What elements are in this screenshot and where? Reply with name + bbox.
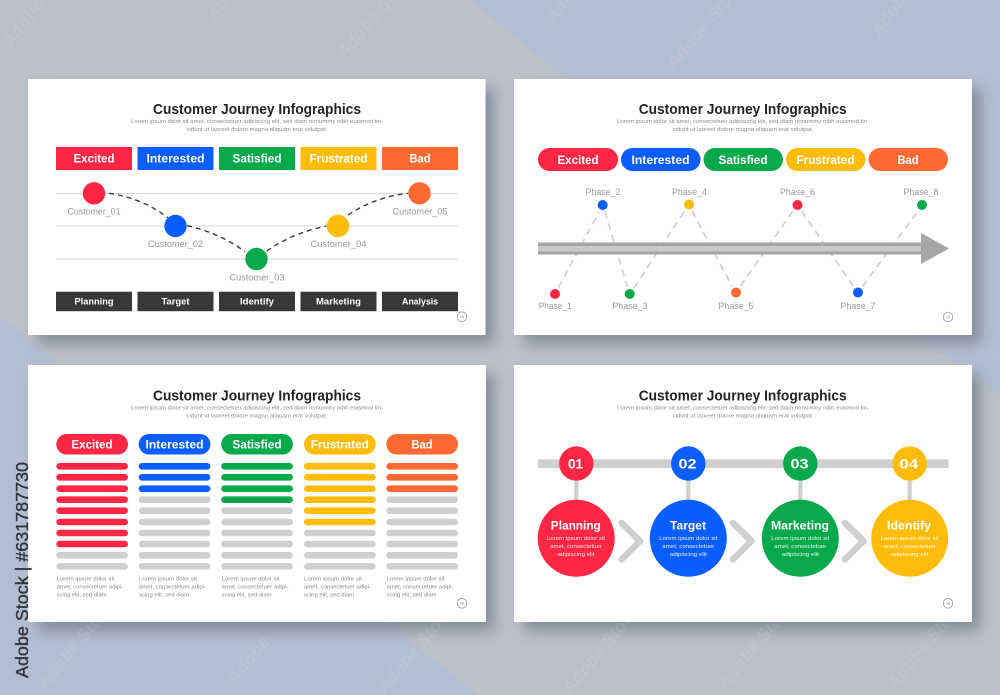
chevron 1 — [622, 523, 640, 560]
background watermarks: Adobe — [222, 632, 274, 688]
panel 2 page number: 14 — [946, 315, 950, 319]
phase dots and labels: Phase_8 — [904, 187, 938, 198]
panel 1 journey chart: Customer_05 — [392, 206, 448, 218]
column: Bad — [386, 434, 458, 598]
panel 2 page number — [943, 312, 953, 322]
step 04: Identify: amet, consectetuer — [884, 544, 936, 550]
panel 2 emotion pills: Satisfied — [718, 155, 768, 167]
panel 1 stage bars — [56, 292, 458, 311]
panel 3 page number — [457, 598, 467, 608]
panel 1 subtitle: cidunt ut laoreet dolore magna aliquam erat volutpat. — [186, 127, 328, 133]
arrow — [538, 233, 949, 264]
step 04: Identify: Lorem ipsum dolor sit — [881, 536, 939, 542]
step 01: Planning: Planning — [551, 520, 601, 532]
step 03: Marketing: adipiscing elit — [782, 552, 819, 558]
column: Bad: Lorem ipsum dolor sit — [386, 576, 445, 582]
column: Satisfied: Lorem ipsum dolor sit — [222, 576, 280, 582]
panel 2 emotion pills: Interested — [632, 155, 690, 167]
column: Interested: scing elit, sed diam — [139, 592, 189, 598]
chevron 2 — [733, 523, 752, 560]
panel 3 subtitle: Lorem ipsum dolor sit amet, consectetuer adipiscing elit, sed diam nonummy nibh euismod tin- — [131, 406, 383, 412]
phase dots and labels: Phase_6 — [780, 187, 815, 198]
background watermarks: Adobe Stock — [372, 600, 459, 695]
panel 1 page number — [457, 312, 467, 322]
panel 1 journey chart: Customer_02 — [148, 239, 203, 250]
panel 1 journey chart: Customer_04 — [310, 239, 366, 250]
phase dots and labels: Phase_5 — [718, 301, 754, 312]
phase dots and labels — [539, 187, 938, 312]
column: Excited: scing elit, sed diam — [56, 592, 107, 598]
panel 3 page number: 15 — [460, 602, 464, 606]
panel 2 subtitle: Lorem ipsum dolor sit amet, consectetuer adipiscing elit, sed diam nonummy nibh euismod tin- — [617, 119, 869, 125]
panel 1: customer journey with rectangles — [28, 79, 486, 335]
step 02: Target: 02 — [678, 456, 697, 472]
step 04: Identify: 04 — [899, 456, 919, 472]
panel 2: phase timeline — [514, 79, 972, 335]
column: Frustrated: amet, consectetuer adipi- — [304, 584, 371, 590]
panel 4 subtitle: Lorem ipsum dolor sit amet, consectetuer adipiscing elit, sed diam nonummy nibh euismod tin- — [617, 406, 869, 412]
step 03: Marketing — [762, 446, 839, 577]
panel 2 dashed connectors — [558, 211, 918, 288]
column: Bad: scing elit, sed diam — [386, 592, 437, 598]
panel 4 page number: 16 — [946, 602, 950, 606]
panel 1 journey chart: Customer_01 — [68, 206, 120, 218]
step 04: Identify: adipiscing elit — [891, 552, 929, 558]
step 02: Target: Target — [670, 520, 706, 532]
panel 1 emotion headers: Interested — [146, 154, 204, 166]
step 01: Planning: 01 — [568, 456, 583, 472]
step 03: Marketing: amet, consectetuer — [774, 544, 826, 550]
step 01: Planning — [538, 446, 615, 577]
panel 3 card — [28, 365, 486, 622]
column: Interested: Interested — [146, 439, 204, 451]
panel 1 stage bars: Identify — [240, 297, 274, 307]
panel 3 subtitle — [131, 406, 383, 420]
column: Bad: amet, consectetuer adipi- — [386, 584, 454, 590]
step 01: Planning: adipiscing elit — [558, 552, 595, 558]
phase dots and labels: Phase_1 — [539, 301, 572, 312]
panel 2 emotion pills: Bad — [898, 155, 918, 167]
column: Excited: amet, consectetuer adipi- — [56, 584, 124, 590]
panel 4 card — [514, 365, 972, 622]
panel 1 card — [28, 79, 486, 335]
column: Frustrated: Frustrated — [311, 439, 369, 451]
panel 1 title: Customer Journey Infographics — [153, 101, 361, 118]
background watermarks: Adobe Stock — [882, 595, 969, 693]
step 01: Planning: Lorem ipsum dolor sit — [547, 536, 605, 542]
panel 3 title: Customer Journey Infographics — [153, 387, 361, 404]
panel 2 subtitle — [617, 119, 869, 133]
panel 1 emotion headers — [56, 147, 458, 170]
panel 1 stage bars: Planning — [74, 297, 114, 307]
step 04: Identify — [871, 446, 948, 577]
panel 2 emotion pills: Frustrated — [796, 155, 854, 167]
column: Frustrated: Lorem ipsum dolor sit — [304, 576, 362, 582]
background watermarks: Adobe Stock — [712, 595, 799, 693]
step 02: Target: amet, consectetuer — [662, 544, 714, 550]
panel 2 emotion pills: Excited — [558, 155, 598, 167]
panel 1 emotion headers: Bad — [410, 154, 430, 166]
column: Excited — [56, 434, 128, 598]
panel 2 emotion pills — [538, 148, 948, 171]
column: Excited: Lorem ipsum dolor sit — [56, 576, 115, 582]
panel 1 journey chart — [56, 182, 458, 284]
phase dots and labels: Phase_3 — [612, 301, 648, 312]
step 02: Target: Lorem ipsum dolor sit — [659, 536, 718, 542]
panel 1 emotion headers: Satisfied — [232, 154, 282, 166]
panel 3: level bars — [28, 365, 486, 622]
step 02: Target — [650, 446, 727, 577]
step 03: Marketing: Marketing — [771, 520, 829, 532]
panel 4 page number — [943, 598, 953, 608]
step 03: Marketing: 03 — [790, 456, 809, 472]
column: Interested: amet, consectetuer adipi- — [139, 584, 206, 590]
column: Interested — [139, 434, 210, 598]
panel 2 subtitle: cidunt ut laoreet dolore magna aliquam erat volutpat. — [672, 127, 814, 133]
panel 2 title: Customer Journey Infographics — [639, 101, 847, 118]
panel 1 subtitle: Lorem ipsum dolor sit amet, consectetuer adipiscing elit, sed diam nonummy nibh euismod tin- — [131, 119, 383, 125]
panel 1 emotion headers: Excited — [74, 154, 114, 166]
column: Satisfied: Satisfied — [232, 439, 282, 451]
phase dots and labels: Phase_4 — [672, 187, 707, 198]
step 02: Target: adipiscing elit — [670, 552, 707, 558]
stock id vertical text: Adobe Stock | #631787730 — [12, 462, 32, 678]
chevron 3 — [845, 523, 864, 560]
phase dots and labels: Phase_7 — [840, 301, 876, 312]
timeline bar — [538, 459, 948, 468]
panel 4 title: Customer Journey Infographics — [639, 387, 847, 404]
step 04: Identify: Identify — [887, 520, 932, 532]
column: Interested: Lorem ipsum dolor sit — [139, 576, 197, 582]
panel 1 page number: 13 — [460, 315, 464, 319]
panel 2 card — [514, 79, 972, 335]
panel 1 stage bars: Analysis — [402, 297, 438, 307]
column: Satisfied: amet, consectetuer adipi- — [222, 584, 289, 590]
panel 4 subtitle — [617, 406, 869, 420]
panel shadows — [38, 88, 980, 631]
panel 4: numbered steps — [514, 365, 972, 622]
step 01: Planning: amet, consectetuer — [550, 544, 602, 550]
panel 1 journey chart: Customer_03 — [230, 272, 284, 284]
step 03: Marketing: Lorem ipsum dolor sit — [771, 536, 830, 542]
panel 3 subtitle: cidunt ut laoreet dolore magna aliquam erat volutpat. — [186, 414, 328, 420]
panel 1 stage bars: Target — [162, 297, 190, 307]
panel 4 subtitle: cidunt ut laoreet dolore magna aliquam erat volutpat. — [672, 414, 814, 420]
phase dots and labels: Phase_2 — [586, 187, 620, 198]
column: Satisfied — [221, 434, 293, 598]
panel 1 emotion headers: Frustrated — [310, 154, 368, 166]
panel 1 stage bars: Marketing — [316, 297, 361, 307]
column: Bad: Bad — [412, 439, 432, 451]
column: Excited: Excited — [72, 439, 112, 451]
background watermarks: Adobe Stock — [557, 600, 644, 695]
column: Frustrated — [304, 434, 376, 598]
column: Frustrated: scing elit, sed diam — [304, 592, 354, 598]
panel 1 subtitle — [131, 119, 383, 133]
background watermarks: Adobe Stock — [32, 595, 119, 693]
column: Satisfied: scing elit, sed diam — [222, 592, 272, 598]
